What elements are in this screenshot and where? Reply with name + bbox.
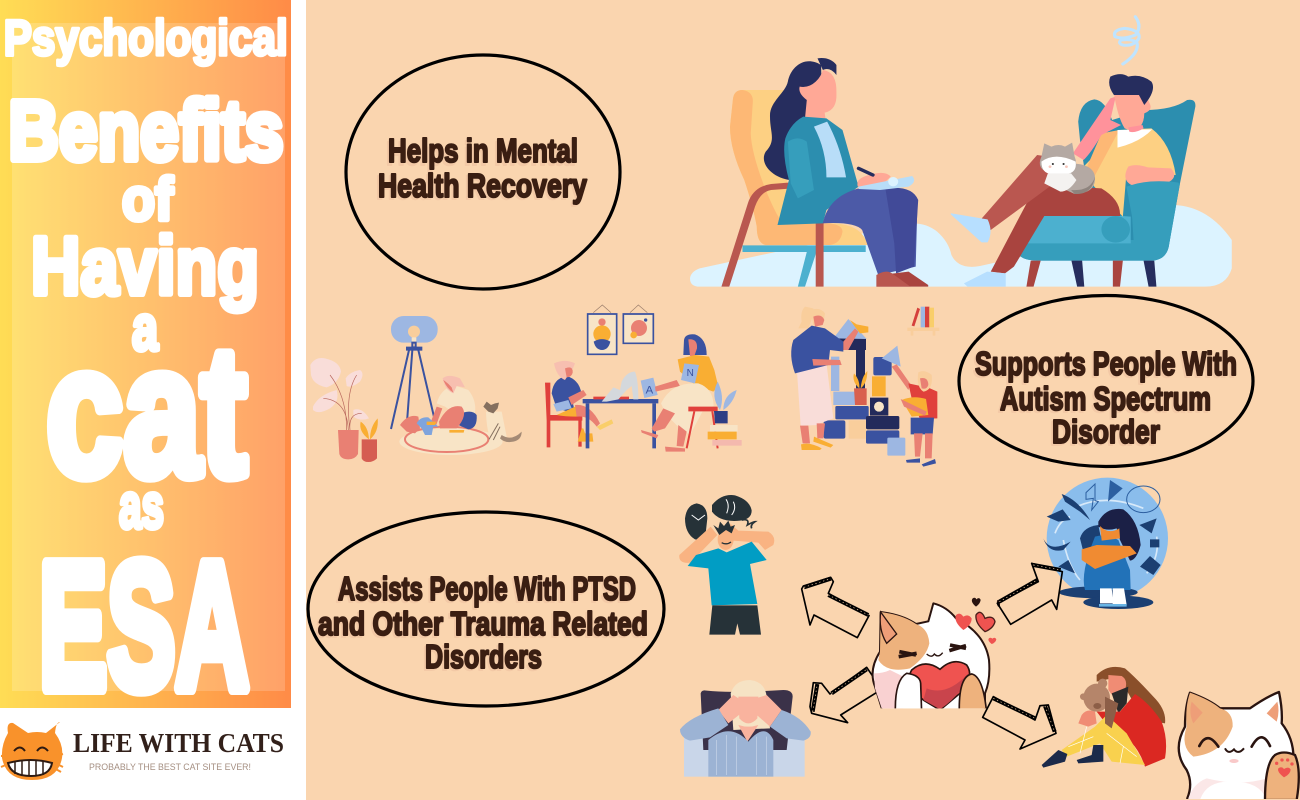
- panel: title banner: [0, 0, 291, 727]
- icon: waving smiling cat: [1179, 692, 1299, 800]
- illustration: parent teaching child at table: [545, 305, 742, 452]
- blocks: [830, 338, 866, 388]
- callout: mental health recovery: [346, 55, 620, 289]
- callout: autism spectrum disorder: Autism Spectrum: [1000, 380, 1211, 417]
- callout: PTSD and trauma: Assists People With PTSD: [336, 572, 634, 609]
- spiral: [1114, 17, 1139, 64]
- child: [892, 364, 911, 390]
- illustration: stressed man with dark thoughts: [679, 495, 774, 635]
- peach background panel: [306, 0, 1300, 800]
- callout: PTSD and trauma: Disorders: [425, 638, 542, 675]
- arrow: toward stressed man: [802, 577, 869, 638]
- title text: ESA: [39, 526, 249, 727]
- title text: cat: [46, 309, 247, 515]
- group: stress figures, arrows, and heart cat: [679, 495, 1000, 777]
- therapist armchair: [721, 90, 867, 287]
- callout: PTSD and trauma: Disorders: [423, 640, 540, 677]
- seated cat: [486, 412, 507, 440]
- child chair: [545, 383, 582, 447]
- callout: mental health recovery: Helps in Mental: [388, 132, 578, 169]
- title text: of: [122, 166, 174, 233]
- arrow: toward person in bed: [810, 667, 882, 723]
- callout: autism spectrum disorder: Autism Spectrum: [998, 382, 1209, 419]
- callout: mental health recovery: Health Recovery: [376, 169, 586, 206]
- title text: a: [132, 292, 158, 364]
- callout: autism spectrum disorder: Disorder: [1052, 413, 1160, 450]
- callout: autism spectrum disorder: [959, 296, 1253, 466]
- client figure: [951, 17, 1176, 287]
- arrow: toward girl with teddy bear: [983, 697, 1056, 749]
- illustration: floor lamp and child playing with cat: [391, 316, 522, 455]
- toys: [400, 416, 420, 433]
- adult: [683, 334, 707, 355]
- arrow: toward girl hugging knees: [997, 563, 1062, 624]
- illustration: parent teaching child at table: A: [646, 384, 654, 396]
- cat on lap: [1040, 143, 1095, 194]
- callout: PTSD and trauma: and Other Trauma Related: [318, 605, 648, 642]
- plant and books: [714, 382, 737, 410]
- child: [552, 376, 582, 413]
- title text: as: [119, 470, 164, 542]
- plant block: [854, 388, 867, 405]
- illustration: girl hugging knees with stress marks: [1043, 478, 1168, 609]
- illustration: potted plants: [310, 358, 378, 462]
- title text: Benefits: [8, 84, 284, 178]
- illustration: therapy session with cat: [690, 17, 1232, 287]
- floor cloud: [690, 205, 1232, 287]
- grey cat on table: [602, 372, 638, 402]
- illustration: parent teaching child at table: N: [687, 368, 694, 379]
- shelf with books: [907, 328, 939, 336]
- callout: mental health recovery: Health Recovery: [378, 167, 588, 204]
- child: [437, 385, 475, 415]
- therapist figure: [764, 58, 928, 287]
- icon: hearts: [955, 598, 1000, 644]
- stool: [688, 407, 718, 411]
- logo: Life With Cats: [1, 722, 284, 780]
- callout: PTSD and trauma: and Other Trauma Related: [316, 607, 646, 644]
- illustration: distressed person in bed: [680, 680, 811, 777]
- illustration: parent and child with building blocks: [791, 307, 939, 467]
- icon: cat hugging heart: [873, 603, 989, 713]
- group: hugging figures, arrows, and big cat: [983, 478, 1299, 800]
- illustration: girl with teddy bear: [1042, 667, 1166, 768]
- table: [583, 399, 658, 403]
- title text: [4, 10, 288, 727]
- title text: Psychological: [4, 10, 288, 66]
- title text: Having: [31, 221, 259, 312]
- client armchair: [1017, 99, 1195, 287]
- adult: [798, 307, 813, 328]
- logo tagline: PROBABLY THE BEST CAT SITE EVER!: [89, 762, 251, 772]
- letter card A: [641, 378, 658, 398]
- icon: grinning orange cat: [1, 722, 63, 780]
- callout: PTSD and trauma: [308, 512, 664, 706]
- callout: PTSD and trauma: Assists People With PTSD: [338, 570, 636, 607]
- callout: autism spectrum disorder: Disorder: [1050, 415, 1158, 452]
- logo wordmark: LIFE WITH CATS: [73, 728, 284, 758]
- callout: mental health recovery: Helps in Mental: [386, 135, 576, 172]
